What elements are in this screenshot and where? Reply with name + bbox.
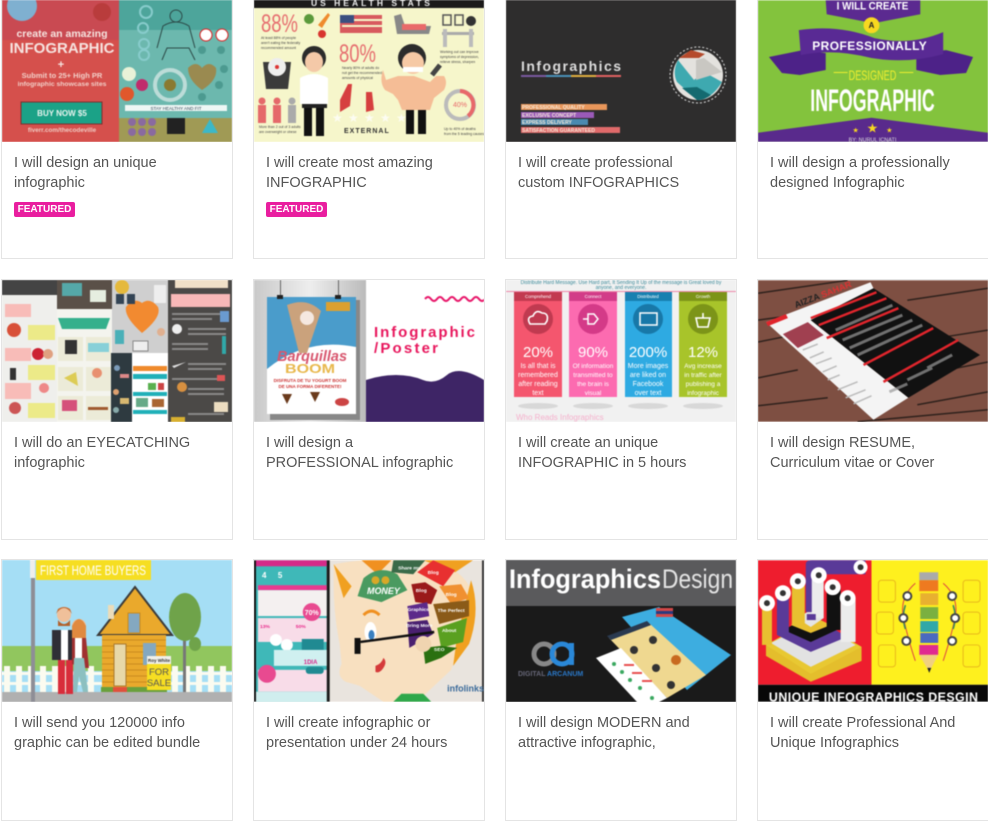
thumbnail: resume on wood table — [758, 280, 988, 422]
gig title: I will create most amazing — [266, 155, 433, 171]
gig title — [14, 715, 200, 751]
thumbnail: create an amazing infographic: infographic showcase sites — [18, 81, 107, 88]
thumbnail: first home buyers: FOR — [149, 667, 169, 678]
gig title — [770, 155, 950, 191]
card: professional custom infographics — [505, 0, 737, 259]
gig title: Curriculum vitae or Cover — [770, 455, 934, 471]
thumbnail: poster mockup: /Poster — [374, 340, 438, 357]
gig title: I will create an unique — [518, 435, 658, 451]
gig title: designed Infographic — [770, 175, 905, 191]
thumbnail: US health stats: are overweight or obese — [259, 130, 297, 134]
thumbnail: four stat columns — [506, 280, 736, 422]
thumbnail: four stat columns: in traffic after — [684, 372, 723, 379]
gig title: presentation under 24 hours — [266, 735, 447, 751]
thumbnail: brain money character: 5 — [278, 571, 283, 580]
gig title — [14, 155, 157, 191]
thumbnail: green professionally designed — [758, 0, 988, 142]
gig title — [770, 435, 934, 471]
thumbnail: collage of infographics — [2, 280, 232, 422]
card: professional and unique infographics — [757, 559, 988, 821]
thumbnail: brain money character: 50% — [296, 624, 306, 630]
gig title: INFOGRAPHIC — [266, 175, 367, 191]
thumbnail: dark infographics cover: SATISFACTION GUARANTEED — [522, 128, 595, 134]
thumbnail: brain money character: About — [442, 628, 457, 634]
thumbnail: resume on wood table: AIZZA SAHAR — [793, 280, 853, 310]
thumbnail: four stat columns: infographic — [687, 390, 720, 397]
thumbnail: US health stats: 88% — [261, 10, 298, 38]
thumbnail: dark infographics cover: EXCLUSIVE CONCEPT — [522, 113, 576, 119]
thumbnail: first home buyers: FIRST HOME BUYERS — [40, 562, 146, 578]
thumbnail: four stat columns: 200% — [629, 344, 667, 361]
thumbnail: US health stats: EXTERNAL — [344, 128, 390, 135]
thumbnail: US health stats: ★ — [396, 111, 407, 125]
thumbnail: US health stats: 80% — [339, 40, 376, 68]
thumbnail: four stat columns: 12% — [688, 344, 718, 361]
thumbnail: brain money character: 13% — [260, 624, 271, 630]
thumbnail: infographics design — [506, 560, 736, 702]
thumbnail: poster mockup: DISFRUTA DE TU YOGURT BOOM — [274, 378, 347, 383]
featured badge — [14, 202, 75, 217]
thumbnail: US health stats: from the 5 leading causes — [444, 132, 484, 136]
gig title — [266, 435, 453, 471]
thumbnail: first home buyers: Roy White — [148, 658, 170, 663]
thumbnail: US health stats: More than 2 out of 3 adults — [259, 125, 301, 129]
thumbnail: brain money character: MONEY — [367, 586, 401, 596]
thumbnail: brain money character: Graphics — [408, 607, 429, 613]
thumbnail: dark infographics cover: Infographics — [521, 58, 621, 74]
thumbnail: four stat columns: publishing a — [686, 381, 721, 388]
thumbnail: four stat columns: Facebook — [633, 381, 664, 388]
thumbnail: green professionally designed: ★ — [852, 127, 859, 135]
thumbnail: green professionally designed: ★ — [867, 121, 878, 136]
thumbnail: brain money character: Blog — [416, 588, 427, 594]
thumbnail: first home buyers — [2, 560, 232, 702]
thumbnail: four stat columns: Distributed — [637, 294, 659, 299]
gig title: I will design a — [266, 435, 353, 451]
thumbnail: brain money character — [254, 560, 484, 702]
thumbnail: four stat columns: over text — [635, 390, 661, 397]
featured badge: FEATURED — [18, 204, 71, 215]
thumbnail: four stat columns: 90% — [578, 344, 608, 361]
thumbnail: four stat columns: More images — [628, 363, 669, 370]
gig title: I will design RESUME, — [770, 435, 915, 451]
thumbnail: US health stats: not get the recommended — [342, 71, 382, 75]
thumbnail: create an amazing infographic: BUY NOW $5 — [37, 109, 87, 118]
gig title: infographic — [14, 455, 85, 471]
gig title: I will create infographic or — [266, 715, 430, 731]
gig title: infographic — [14, 175, 85, 191]
thumbnail: four stat columns: visual — [585, 390, 602, 397]
thumbnail: US health stats: symptoms of depression, — [440, 55, 479, 59]
thumbnail: US health stats: ★ — [348, 111, 359, 125]
thumbnail: poster mockup: DE UNA FORMA DIFERENTE! — [279, 384, 342, 389]
thumbnail: create an amazing infographic: create an amazing — [16, 28, 108, 40]
thumbnail: green professionally designed: A — [869, 21, 875, 30]
thumbnail: four stat columns: Distribute Hard Message. Use Hard part, It Sending It Up of the message is Great loved by — [521, 280, 722, 286]
gig title: INFOGRAPHIC in 5 hours — [518, 455, 686, 471]
thumbnail: four stat columns: are liked on — [630, 372, 666, 379]
thumbnail: dark infographics cover — [506, 0, 736, 142]
gig title: I will design MODERN and — [518, 715, 690, 731]
thumbnail: first home buyers: SALE — [147, 678, 171, 689]
gig title — [518, 715, 690, 751]
gig title: I will send you 120000 info — [14, 715, 185, 731]
gig title: Unique Infographics — [770, 735, 899, 751]
gig title — [518, 435, 686, 471]
thumbnail: brain money character: SEO — [434, 647, 445, 653]
gig title: custom INFOGRAPHICS — [518, 175, 679, 191]
gig title — [266, 155, 433, 191]
thumbnail: poster mockup: Barquillas — [277, 348, 347, 365]
thumbnail: dark infographics cover: EXPRESS DELIVERY — [522, 120, 572, 126]
card: unique infographic — [1, 0, 233, 259]
thumbnail: US health stats: Nearly 80% of adults do — [342, 66, 379, 70]
thumbnail: create an amazing infographic: fiverr.com/thecodeville — [28, 127, 97, 134]
gig title: PROFESSIONAL infographic — [266, 455, 453, 471]
thumbnail: four stat columns: after reading — [518, 381, 558, 388]
thumbnail: brain money character: 4 — [262, 571, 267, 580]
thumbnail: poster mockup: Infographic — [374, 324, 475, 341]
thumbnail: US health stats: Up to 40% of deaths — [444, 127, 476, 131]
card: unique infographic in 5 hours — [505, 279, 737, 540]
thumbnail: create an amazing infographic: STAY HEALTHY AND FIT — [150, 106, 202, 111]
card: presentation under 24 hours — [253, 559, 485, 821]
card: resume — [757, 279, 988, 540]
card: info graphic bundle — [1, 559, 233, 821]
thumbnail: US health stats — [254, 0, 484, 142]
thumbnail: brain money character: infolinks — [447, 684, 484, 694]
thumbnail: four stat columns: Of information — [573, 363, 614, 370]
gig title — [14, 435, 190, 471]
thumbnail: US health stats: Working out can improve — [440, 50, 479, 54]
thumbnail: create an amazing infographic: INFOGRAPHIC — [10, 40, 115, 57]
thumbnail: green professionally designed: DESIGNED — [849, 67, 896, 83]
gig title — [770, 715, 955, 751]
thumbnail: isometric pyramid and pencil — [758, 560, 988, 702]
thumbnail: brain money character: Blog — [428, 570, 439, 576]
thumbnail: four stat columns: remembered — [518, 372, 558, 379]
thumbnail: green professionally designed: PROFESSIONALLY — [812, 39, 927, 53]
featured badge — [266, 202, 327, 217]
gig title: I will do an EYECATCHING — [14, 435, 190, 451]
head — [334, 560, 472, 702]
thumbnail: four stat columns: Comprehend — [525, 294, 552, 299]
thumbnail: brain money character: Bring More — [406, 623, 433, 629]
thumbnail: brain money character: Blog — [446, 592, 457, 598]
thumbnail: brain money character: 1DIA — [304, 660, 318, 666]
thumbnail: four stat columns: Who Reads Infographics — [516, 413, 604, 422]
thumbnail: four stat columns: the brain is — [577, 381, 610, 388]
thumbnail: US health stats: ★ — [380, 111, 391, 125]
thumbnail: four stat columns: text — [532, 390, 544, 397]
thumbnail: poster mockup — [254, 280, 484, 422]
thumbnail: dark infographics cover: PROFESSIONAL QUALITY — [522, 105, 585, 111]
muscular figure — [398, 44, 426, 72]
thumbnail: infographics design: DIGITAL ARCANUM — [518, 671, 583, 678]
thumbnail: green professionally designed: I WILL CREATE — [837, 0, 908, 12]
thumbnail: US health stats: At least 88% of people — [261, 36, 296, 40]
thumbnail: create an amazing infographic: + — [58, 59, 64, 71]
card: professionally designed infographic — [757, 0, 988, 259]
gig title: I will design an unique — [14, 155, 157, 171]
card: professional infographic poster — [253, 279, 485, 540]
gig title: graphic can be edited bundle — [14, 735, 200, 751]
thumbnail: four stat columns: anyone, and everyone. — [596, 285, 646, 291]
thumbnail: create an amazing infographic: Submit to 25+ High PR — [22, 71, 103, 80]
thumbnail: poster mockup: BOOM — [285, 361, 335, 376]
thumbnail: four stat columns: Is all that is — [520, 363, 556, 370]
gig title: I will create Professional And — [770, 715, 955, 731]
thumbnail: four stat columns: Avg increase — [684, 363, 722, 370]
gig title — [518, 155, 679, 191]
thumbnail: US health stats: relieve stress, sharpen — [440, 60, 475, 64]
thumbnail: US health stats: aren't eating the federally — [261, 41, 300, 45]
thumbnail: US health stats: ★ — [332, 111, 343, 125]
thumbnail: US health stats: amounts of physical — [342, 76, 373, 80]
thumbnail: US health stats: ★ — [364, 111, 375, 125]
thumbnail: US health stats: 40% — [453, 102, 467, 109]
thumbnail: green professionally designed: ★ — [886, 127, 893, 135]
thumbnail: brain money character: The Perfect — [438, 608, 465, 614]
thumbnail: brain money character: 70% — [305, 610, 319, 617]
card: US health stats — [253, 0, 485, 259]
card: modern attractive infographic — [505, 559, 737, 821]
slim figure — [302, 46, 326, 70]
thumbnail: US health stats: recommended amount — [261, 46, 296, 50]
card: eyecatching infographic — [1, 279, 233, 540]
gig title — [266, 715, 447, 751]
thumbnail: four stat columns: Connect — [585, 294, 602, 299]
thumbnail: brain money character: Share my — [398, 565, 421, 571]
thumbnail: four stat columns: Growth — [696, 294, 711, 299]
gig title: I will create professional — [518, 155, 673, 171]
gig title: attractive infographic, — [518, 735, 656, 751]
gig title: I will design a professionally — [770, 155, 950, 171]
thumbnail: four stat columns: 20% — [523, 344, 553, 361]
thumbnail: infographics design: Infographics — [509, 564, 661, 594]
featured badge: FEATURED — [270, 204, 323, 215]
thumbnail: four stat columns: transmitted to — [573, 372, 613, 379]
thumbnail: create an amazing infographic — [2, 0, 232, 142]
